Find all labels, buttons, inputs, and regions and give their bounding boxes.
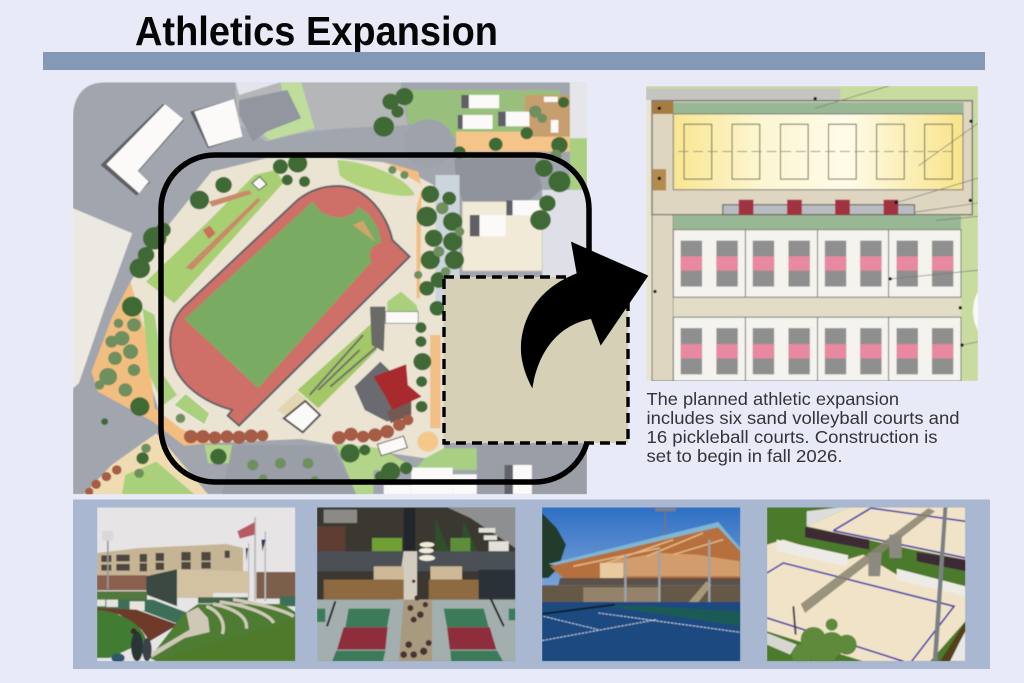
road base — [73, 82, 587, 494]
right pale area — [542, 190, 587, 280]
plan ground — [646, 86, 978, 381]
upper walkway — [652, 101, 972, 215]
bottom white buildings — [411, 468, 453, 494]
campus grounds — [131, 158, 444, 458]
lower walkways — [652, 215, 673, 381]
photo: tennis pavilion — [542, 507, 740, 662]
pickleball courts — [681, 241, 953, 374]
title band — [43, 52, 985, 70]
description text: set to begin in fall 2026. — [646, 446, 842, 466]
photo: ballpark — [97, 507, 296, 662]
long jump lawn — [146, 170, 284, 303]
highlight frame: rounded outline — [161, 155, 589, 482]
red-brown tree rows — [184, 415, 413, 444]
description text: The planned athletic expansion — [646, 389, 899, 409]
bottom left brown trees — [85, 465, 122, 496]
terraced seating — [150, 604, 295, 661]
volleyball court lines — [678, 124, 957, 179]
bleachers — [723, 205, 915, 215]
right building pad — [454, 158, 542, 202]
upper paved lots — [236, 82, 408, 142]
volleyball sand — [673, 114, 963, 190]
pole — [933, 507, 947, 661]
cul de sac — [404, 119, 453, 167]
arrow — [521, 242, 648, 388]
green trees — [101, 88, 570, 482]
leader lines and markers — [815, 86, 978, 345]
service pads — [653, 101, 673, 114]
track — [170, 186, 410, 426]
description text — [646, 389, 960, 466]
north green field — [337, 160, 415, 196]
banner walls — [805, 527, 869, 550]
site plan map — [73, 82, 587, 494]
title: Athletics Expansion — [135, 8, 498, 54]
photo: pickleball plaza — [317, 507, 516, 662]
photo: beach volleyball courts — [767, 507, 966, 662]
description text: includes six sand volleyball courts and — [646, 408, 960, 428]
white wedge, left — [73, 208, 132, 388]
pickleball pads — [673, 230, 961, 297]
court lines — [767, 508, 965, 661]
top right garden — [404, 90, 570, 138]
net — [801, 508, 935, 613]
referee stands — [868, 535, 902, 576]
top left buildings — [101, 104, 184, 196]
lighter mixed shrubs — [95, 106, 562, 484]
description text: 16 pickleball courts. Construction is — [646, 427, 938, 447]
tree — [792, 619, 857, 667]
pickleball kitchens — [681, 256, 953, 358]
orange planting band — [92, 282, 211, 446]
south lawns — [174, 393, 210, 425]
court layout plan — [646, 86, 978, 381]
bottom roads and lawns — [222, 445, 356, 494]
photo strip panel — [73, 500, 990, 669]
orange plaza and strip — [430, 335, 441, 428]
infield — [185, 201, 381, 388]
expansion site: dashed tan square — [444, 277, 628, 443]
top right buildings — [460, 95, 558, 236]
shade canopy — [354, 362, 411, 422]
